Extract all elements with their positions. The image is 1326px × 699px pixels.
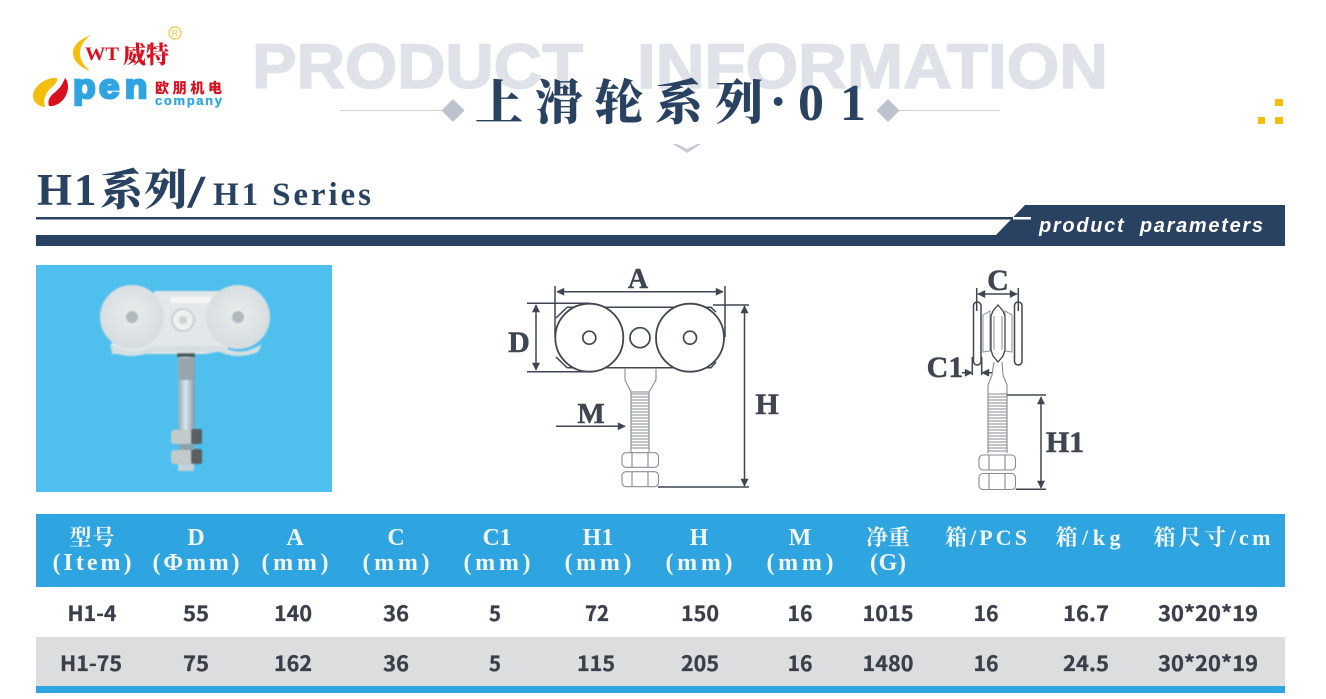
table header: (mm) — [666, 550, 732, 576]
row: H1-4 — [36, 587, 1285, 637]
icon: yellow crescent — [73, 35, 91, 71]
section heading: H1 Series: 系列 — [100, 157, 188, 218]
logo text: company: company — [155, 93, 223, 108]
dimension A — [555, 264, 725, 337]
row: H1-75: 30*20*19 — [1158, 648, 1258, 678]
row: H1-4: 55 — [183, 598, 209, 628]
table header: D — [187, 525, 205, 551]
logo text: WT 威特: 威特 — [123, 35, 169, 70]
dimension C1: C1 — [927, 351, 963, 384]
logo: WT and Open company — [33, 27, 223, 108]
row: H1-4: 16.7 — [1063, 598, 1109, 628]
dimension D — [508, 303, 590, 372]
dimension H1: H1 — [1046, 426, 1084, 459]
background heading: PRODUCT INFORMATION: INFORMATION — [637, 32, 1108, 102]
wheel profile — [974, 302, 1022, 365]
section banner: product parameters — [36, 205, 1285, 246]
table: product parameters — [36, 514, 1285, 693]
dimension D: D — [508, 326, 530, 359]
row: H1-4: 72 — [585, 598, 609, 628]
table header: C1 — [482, 525, 512, 551]
chevron — [673, 144, 701, 153]
table header: (G) — [870, 550, 906, 576]
dimension H: H — [755, 388, 779, 421]
row: H1-4: H1-4 — [68, 598, 116, 628]
background heading: PRODUCT INFORMATION — [252, 32, 1108, 102]
row: H1-75: 75 — [183, 648, 209, 678]
dimension M — [556, 398, 625, 430]
dimension M: M — [577, 398, 605, 430]
diagram: front view — [508, 264, 779, 487]
table header: (mm) — [766, 550, 834, 576]
table header: (mm) — [262, 550, 328, 576]
row: H1-75: 16 — [788, 648, 812, 678]
table header: 箱/PCS — [945, 525, 1027, 550]
decorative yellow squares — [1258, 99, 1283, 124]
threaded bolt and nuts — [622, 368, 658, 487]
background heading: PRODUCT INFORMATION: PRODUCT — [252, 32, 583, 102]
logo text: WT 威特 — [85, 35, 169, 70]
panel: product photo — [36, 265, 332, 492]
section heading: H1 Series — [37, 157, 374, 218]
table header: 型号 — [70, 525, 114, 550]
icon: registered mark: R — [172, 28, 179, 38]
title with diamonds — [340, 64, 1000, 153]
row: H1-75: 24.5 — [1063, 648, 1109, 678]
row: H1-75: 1480 — [862, 648, 914, 678]
title text: 上滑轮系列 — [475, 64, 775, 133]
threaded bolt and nuts — [979, 362, 1016, 490]
row: H1-75: 36 — [383, 648, 409, 678]
title text: 0 — [798, 75, 824, 132]
table header: C — [387, 525, 405, 551]
table header: A — [286, 525, 304, 551]
row: H1-4: 1015 — [862, 598, 914, 628]
row: H1-4: 30*20*19 — [1158, 598, 1258, 628]
diagram: side view — [927, 264, 1084, 490]
row: H1-75: H1-75 — [60, 648, 122, 678]
row: H1-4: 36 — [383, 598, 409, 628]
table header: (mm) — [564, 550, 632, 576]
logo text: 欧朋机电: 欧朋机电 — [155, 78, 222, 98]
row: H1-75: 16 — [974, 648, 998, 678]
row: H1-75: 162 — [274, 648, 312, 678]
section heading: H1 Series: / — [187, 166, 206, 217]
row: H1-4: 150 — [681, 598, 719, 628]
dimension C1 — [927, 351, 992, 384]
row: H1-75: 5 — [489, 648, 501, 678]
row: H1-75: 205 — [681, 648, 719, 678]
roller assembly illustration — [100, 285, 270, 471]
table header: (mm) — [362, 550, 430, 576]
table header: H1 — [582, 525, 614, 551]
dimension H — [658, 305, 779, 487]
logo text: WT 威特: WT — [85, 44, 119, 65]
table header — [36, 514, 1285, 587]
title text: 1 — [840, 75, 866, 132]
dimension H1 — [1007, 395, 1084, 489]
dimension C: C — [987, 264, 1009, 297]
table header: H — [690, 525, 709, 551]
logo text: pen: pen — [73, 68, 147, 106]
dimension A: A — [628, 264, 649, 295]
row: H1-4: 16 — [974, 598, 998, 628]
section heading: H1 Series: H1 Series — [213, 177, 374, 213]
icon: open swoosh — [33, 78, 68, 107]
title text: · — [770, 64, 786, 133]
section heading: H1 Series: H1 — [37, 165, 99, 215]
wheel carriage — [555, 304, 724, 372]
row: H1-75: 115 — [577, 648, 615, 678]
section banner: product parameters: product parameters — [1038, 215, 1263, 237]
row: H1-75 — [36, 637, 1285, 686]
table header: M — [789, 525, 811, 551]
left rule and diamond — [340, 99, 464, 122]
table header: 净重 — [866, 525, 910, 550]
dimension C — [977, 264, 1018, 311]
table header: 箱/kg — [1056, 525, 1120, 550]
table header: (Item) — [52, 550, 132, 576]
row: H1-4: 16 — [788, 598, 812, 628]
right rule and diamond — [876, 99, 1000, 122]
row: H1-4: 5 — [489, 598, 501, 628]
icon: registered mark — [169, 27, 181, 39]
row: H1-4: 140 — [274, 598, 312, 628]
table bottom bar — [36, 686, 1285, 693]
table header: (Φmm) — [152, 550, 240, 576]
table header: (mm) — [464, 550, 530, 576]
table header: 箱尺寸/cm — [1154, 525, 1270, 550]
